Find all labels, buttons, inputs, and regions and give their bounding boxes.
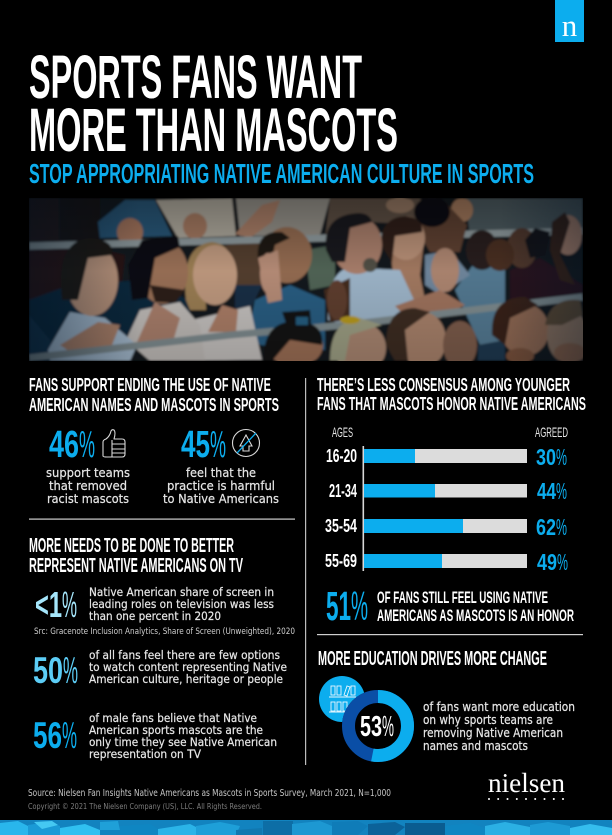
bar chart: agreement by age: 49 <box>537 549 557 575</box>
text: want more education: names and mascots <box>423 739 528 753</box>
bar chart: agreement by age: 35-54 <box>325 516 357 536</box>
bar chart: agreement by age: AGES <box>332 424 353 440</box>
stat: 56 percent: 56 <box>33 715 62 756</box>
panel: fans support ending mascots: % <box>79 424 95 466</box>
stat: 45 percent: 45 <box>181 424 210 466</box>
panel: fans support ending mascots: % <box>210 424 226 466</box>
chart: 53 percent donut <box>342 690 414 762</box>
panel: representation on TV: % <box>63 650 78 691</box>
panel: representation on TV: % <box>62 715 77 756</box>
heading: fans support: FANS SUPPORT ENDING THE USE OF NATIVE <box>29 374 271 395</box>
source note: Source: Nielsen Fan Insights Native Americans as Mascots in Sports Survey, March 2021, N=1,000 <box>28 788 391 799</box>
panel: fans support ending mascots <box>29 374 279 506</box>
heading: more needs to be done: MORE NEEDS TO BE DONE TO BETTER <box>29 535 234 557</box>
text: few options: to watch content representing Native <box>89 660 287 674</box>
rail top <box>29 231 583 246</box>
text: want more education: of fans want more education <box>423 700 575 714</box>
text: male fans: of male fans believe that Native <box>89 711 257 725</box>
logo: nielsen wordmark: nielsen <box>488 768 565 798</box>
rail bottom <box>29 297 583 358</box>
panel: younger fans consensus: % <box>351 583 368 629</box>
heading: fans support: AMERICAN NAMES AND MASCOTS IN SPORTS <box>29 394 279 415</box>
footer: blue cube strip <box>0 820 612 835</box>
icon: crossed-out arrow <box>232 430 260 456</box>
icon: books on shelves <box>319 676 365 722</box>
panel: representation on TV <box>29 535 295 761</box>
copyright: Copyright © 2021 The Nielsen Company (US), LLC. All Rights Reserved. <box>28 802 262 811</box>
source note: Gracenote: Src: Gracenote Inclusion Analytics, Share of Screen (Unweighted), 2020 <box>34 627 295 637</box>
stat: less than 1 percent: <1 <box>35 584 62 625</box>
text: want more education: removing Native American <box>423 726 563 740</box>
heading: fans support <box>29 374 279 415</box>
text: feel the practice is harmful: practice is harmful <box>167 478 275 493</box>
heading: more needs to be done <box>29 535 243 577</box>
text: male fans: American sports mascots are the <box>89 723 263 737</box>
text: few options: of all fans feel there are few options <box>89 648 280 662</box>
title <box>29 43 398 164</box>
heading: less consensus <box>317 374 586 414</box>
bar chart: agreement by age: 16-20 <box>326 446 357 466</box>
text: few options: American culture, heritage or people <box>89 672 283 686</box>
bar chart: agreement by age: 21-34 <box>329 481 357 501</box>
text: support teams: racist mascots <box>47 491 129 506</box>
stat: 51 percent: 51 <box>326 583 351 629</box>
text: still feel an honor <box>377 589 574 625</box>
bar chart: agreement by age: AGREED <box>535 424 568 440</box>
bar chart: agreement by age: 62 <box>536 514 556 540</box>
text: feel the practice is harmful <box>163 465 279 506</box>
bar chart: agreement by age: 30 <box>536 444 556 470</box>
text: support teams: support teams <box>46 465 130 480</box>
bar chart: agreement by age: % <box>556 444 567 470</box>
chart: 53 percent donut: % <box>382 711 394 743</box>
stat: 46 percent: 46 <box>49 424 79 466</box>
text: share of screen: leading roles on television was less <box>89 597 274 611</box>
chart: 53 percent donut: 53 <box>360 711 382 743</box>
text: male fans: representation on TV <box>89 747 201 761</box>
panel: education <box>318 648 575 762</box>
photo: crowd of clapping fans <box>29 197 587 374</box>
bar chart: agreement by age: % <box>556 478 567 504</box>
text: feel the practice is harmful: to Native Americans <box>163 491 279 506</box>
text: want more education <box>423 700 575 753</box>
logo: Nielsen n badge: n <box>562 8 578 43</box>
stat: 50 percent: 50 <box>33 650 63 691</box>
logo: Nielsen n badge <box>555 0 584 43</box>
text: few options <box>89 648 287 686</box>
panel: representation on TV: % <box>62 584 77 625</box>
text: male fans: only time they see Native American <box>89 735 277 749</box>
text: share of screen <box>89 585 274 623</box>
bar chart: agreement by age: 44 <box>537 478 556 504</box>
bar chart: agreement by age: 55-69 <box>325 551 357 571</box>
bar chart: agreement by age: % <box>557 549 568 575</box>
bar chart: agreement by age <box>325 424 568 575</box>
icon: thumbs up <box>103 430 125 457</box>
bar chart: agreement by age: % <box>556 514 567 540</box>
text: support teams <box>46 465 130 506</box>
text: want more education: on why sports teams are <box>423 713 553 727</box>
text: share of screen: than one percent in 2020 <box>89 609 221 623</box>
text: share of screen: Native American share of screen in <box>89 585 274 599</box>
text: support teams: that removed <box>49 478 127 493</box>
text: feel the practice is harmful: feel that the <box>186 465 256 480</box>
text: male fans <box>89 711 277 761</box>
heading: more needs to be done: REPRESENT NATIVE AMERICANS ON TV <box>29 555 243 577</box>
panel: younger fans consensus <box>317 374 586 629</box>
